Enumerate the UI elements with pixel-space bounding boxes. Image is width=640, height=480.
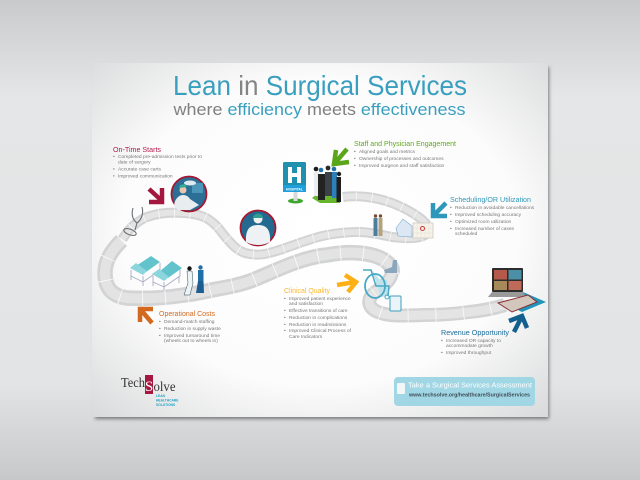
winding road bbox=[105, 196, 505, 316]
icon: stethoscope bbox=[123, 207, 143, 237]
arrow: scheduling bbox=[433, 203, 447, 216]
panel: staff and physician engagement: Ownership of processes and outcomes bbox=[359, 156, 444, 162]
subtitle: where efficiency meets effectiveness bbox=[172, 100, 465, 119]
panel: clinical quality: Improved patient experience bbox=[289, 296, 351, 302]
panel: revenue opportunity: Increased OR capacity to bbox=[446, 338, 501, 344]
panel: clinical quality: • bbox=[284, 329, 286, 334]
icon: laptop bbox=[488, 268, 526, 297]
logo: olve bbox=[154, 379, 176, 394]
icon: hospital sign bbox=[283, 162, 306, 204]
icon: doctor and nurse bbox=[184, 265, 204, 295]
panel: on-time starts: Accurate case carts bbox=[118, 166, 162, 172]
icon: report book bbox=[498, 295, 537, 312]
panel: on-time starts: On-Time Starts bbox=[113, 145, 161, 154]
icon: surgeon circle bbox=[172, 176, 206, 212]
panel: scheduling and OR utilization: • bbox=[450, 220, 452, 225]
panel: staff and physician engagement: • bbox=[354, 150, 356, 155]
arrow: revenue bbox=[509, 316, 527, 332]
panel: scheduling and OR utilization: • bbox=[450, 227, 452, 232]
arrow: on-time starts bbox=[149, 188, 162, 202]
logo: HEALTHCARE bbox=[156, 398, 179, 402]
icon: wheelchair bbox=[363, 270, 389, 299]
panel: operational costs: • bbox=[159, 327, 161, 332]
panel: scheduling and OR utilization: Improved scheduling accuracy bbox=[455, 212, 522, 218]
panel: staff and physician engagement: Aligned goals and metrics bbox=[359, 149, 416, 155]
panel: scheduling and OR utilization: Optimized room utilization bbox=[455, 219, 512, 225]
panel: operational costs: • bbox=[159, 334, 161, 339]
callout: assessment bbox=[394, 377, 535, 406]
panel: operational costs: • bbox=[159, 320, 161, 325]
icon: clipboard bbox=[390, 296, 401, 311]
panel: clinical quality: • bbox=[284, 323, 286, 328]
logo: SOLUTIONS bbox=[156, 403, 176, 407]
panel: clinical quality: and satisfaction bbox=[289, 301, 323, 307]
panel: on-time starts: Completed pre-admission tests prior to bbox=[118, 154, 202, 160]
panel: on-time starts: • bbox=[113, 168, 115, 172]
panel: clinical quality: • bbox=[284, 316, 286, 321]
panel: revenue opportunity: accommodate growth bbox=[446, 343, 493, 349]
logo: S bbox=[145, 379, 153, 395]
panel: clinical quality: Effective transitions of care bbox=[289, 308, 348, 314]
panel: revenue opportunity: Improved throughput bbox=[446, 350, 492, 356]
arrow: clinical quality bbox=[337, 275, 356, 292]
callout: assessment: Take a Surgical Services Assessment bbox=[408, 380, 532, 390]
panel: scheduling and OR utilization: scheduled bbox=[455, 231, 478, 237]
panel: staff and physician engagement: • bbox=[354, 164, 356, 169]
panel: clinical quality: Improved Clinical Process of bbox=[289, 328, 352, 334]
panel: revenue opportunity: • bbox=[441, 351, 443, 356]
panel: scheduling and OR utilization: • bbox=[450, 213, 452, 218]
panel: operational costs: Demand-match staffing bbox=[164, 319, 215, 325]
panel: clinical quality: • bbox=[284, 309, 286, 314]
panel: on-time starts: Improved communication bbox=[118, 174, 173, 180]
panel: operational costs: (wheels out to wheels in) bbox=[164, 338, 218, 344]
panel: scheduling and OR utilization bbox=[450, 195, 535, 237]
panel: operational costs: Reduction in supply waste bbox=[164, 326, 221, 332]
icon: blue folder bbox=[510, 292, 546, 312]
panel: staff and physician engagement bbox=[354, 139, 457, 169]
panel: revenue opportunity: • bbox=[441, 339, 443, 344]
poster panel bbox=[92, 63, 548, 417]
icon: masked surgeon circle bbox=[240, 210, 276, 246]
title: Lean in Surgical Services bbox=[173, 70, 467, 101]
icon: medical supplies bbox=[384, 260, 397, 273]
panel: clinical quality: Reduction in readmissions bbox=[289, 322, 347, 328]
panel: clinical quality bbox=[284, 286, 352, 340]
logo bbox=[121, 375, 179, 407]
icon: two staff figures bbox=[374, 214, 382, 236]
panel: operational costs: Operational Costs bbox=[159, 309, 215, 318]
panel: staff and physician engagement: • bbox=[354, 157, 356, 162]
panel: revenue opportunity bbox=[441, 328, 509, 356]
panel: revenue opportunity: Revenue Opportunity bbox=[441, 328, 509, 337]
panel: clinical quality: Reduction in complications bbox=[289, 315, 348, 321]
logo: LEAN bbox=[156, 394, 166, 398]
callout: assessment: www.techsolve.org/healthcare/SurgicalServices bbox=[408, 392, 530, 398]
panel: clinical quality: Care Indicators bbox=[289, 334, 323, 340]
panel: scheduling and OR utilization: Increased number of cases bbox=[455, 226, 515, 232]
icon: staff group bbox=[312, 166, 341, 203]
panel: clinical quality: • bbox=[284, 297, 286, 302]
arrow: staff bbox=[334, 149, 349, 164]
poster shadow bbox=[95, 67, 549, 419]
panel: scheduling and OR utilization: Reduction in avoidable cancellations bbox=[455, 205, 535, 211]
icon: calendar bbox=[413, 223, 433, 238]
arrow: operational costs bbox=[140, 309, 153, 323]
panel: on-time starts bbox=[113, 145, 202, 180]
panel: staff and physician engagement: Improved surgeon and staff satisfaction bbox=[359, 163, 445, 169]
panel: on-time starts: • bbox=[113, 155, 115, 160]
logo: Tech bbox=[121, 375, 145, 390]
panel: on-time starts: • bbox=[113, 174, 115, 180]
panel: clinical quality: Clinical Quality bbox=[284, 286, 330, 295]
panel: operational costs bbox=[159, 309, 221, 344]
icon: hospital sign: HOSPITAL bbox=[286, 188, 303, 192]
panel: scheduling and OR utilization: Scheduling/OR Utilization bbox=[450, 195, 531, 204]
panel: on-time starts: date of surgery bbox=[118, 160, 151, 166]
icon: two hospital beds bbox=[130, 256, 182, 290]
panel: operational costs: Improved turnaround time bbox=[164, 333, 220, 339]
panel: scheduling and OR utilization: • bbox=[450, 206, 452, 211]
icon: clipboard papers bbox=[396, 219, 412, 237]
panel: staff and physician engagement: Staff and Physician Engagement bbox=[354, 139, 457, 148]
